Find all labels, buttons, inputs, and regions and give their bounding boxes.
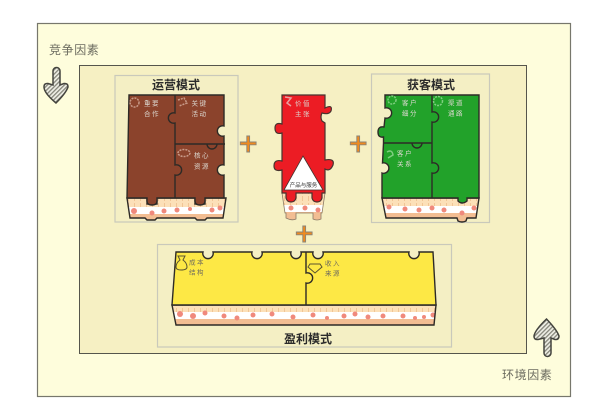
label: environment factors: 环境因素	[502, 367, 552, 382]
puzzle piece: yellow	[172, 252, 436, 305]
layer strip: red piece	[282, 194, 324, 220]
outer frame	[38, 24, 570, 396]
text: customer relationships	[397, 148, 413, 168]
panel: customer model	[372, 74, 490, 222]
icon: value	[285, 97, 291, 106]
text: key resources: 核心	[194, 150, 210, 160]
text: key partners: 合作	[144, 109, 160, 118]
piece dividers	[168, 95, 225, 198]
puzzle piece: green	[378, 95, 479, 203]
text: key activities	[192, 98, 208, 118]
puzzle piece: brown	[127, 95, 224, 205]
layer strip: yellow piece	[173, 306, 435, 324]
panel: operating model	[115, 76, 238, 222]
text: cost structure	[189, 258, 205, 276]
icon: money bag	[176, 256, 187, 270]
plus: right	[350, 136, 366, 152]
piece divider	[306, 252, 313, 305]
text: value proposition	[295, 98, 311, 118]
heading: customer model: 获客模式	[407, 77, 455, 92]
icon: down arrow	[44, 68, 68, 103]
icon: partners	[130, 98, 139, 107]
plus: bottom	[296, 226, 312, 242]
text: key resources	[194, 150, 210, 170]
text: value proposition: 价值	[295, 98, 311, 108]
text: revenue streams: 收入	[325, 258, 341, 268]
panel: value proposition	[274, 95, 333, 222]
text: customer relationships: 关系	[397, 159, 413, 168]
heading: profit model: 盈利模式	[284, 331, 332, 346]
icon: relationships	[387, 151, 393, 158]
icon: diamond	[308, 264, 322, 273]
puzzle piece: red	[274, 95, 333, 202]
icon: resources	[178, 150, 190, 156]
text: key resources: 资源	[194, 162, 210, 170]
icon: activities	[178, 98, 187, 106]
text: customer segments	[402, 98, 418, 118]
text: product and service: 产品与服务	[290, 181, 318, 189]
text: revenue streams: 来源	[325, 268, 341, 278]
triangle: product and service	[284, 156, 323, 190]
icon: up arrow	[534, 319, 559, 356]
layer strip: green piece	[380, 198, 481, 222]
text: customer relationships: 客户	[397, 148, 413, 158]
text: value proposition: 主张	[295, 109, 311, 118]
text: channels	[448, 98, 464, 118]
heading: operating model: 运营模式	[152, 77, 200, 92]
text: customer segments: 客户	[402, 98, 418, 107]
text: customer segments: 细分	[402, 108, 418, 118]
icon: segments	[388, 96, 396, 104]
text: cost structure: 成本	[189, 258, 205, 266]
text: cost structure: 结构	[189, 268, 205, 276]
inner frame	[80, 66, 526, 354]
layer strip: brown piece	[128, 198, 225, 220]
text: channels: 渠道	[448, 98, 464, 107]
text: key partners	[144, 100, 160, 118]
text: key activities: 活动	[192, 109, 208, 118]
plus: left	[240, 136, 256, 152]
text: revenue streams	[325, 258, 341, 278]
icon: channels	[434, 96, 442, 106]
text: key partners: 重要	[144, 100, 160, 108]
text: key activities: 关键	[192, 98, 208, 108]
text: channels: 通路	[448, 108, 464, 118]
panel: profit model	[158, 244, 452, 347]
piece dividers	[384, 95, 439, 198]
label: competition factors: 竞争因素	[49, 43, 99, 57]
